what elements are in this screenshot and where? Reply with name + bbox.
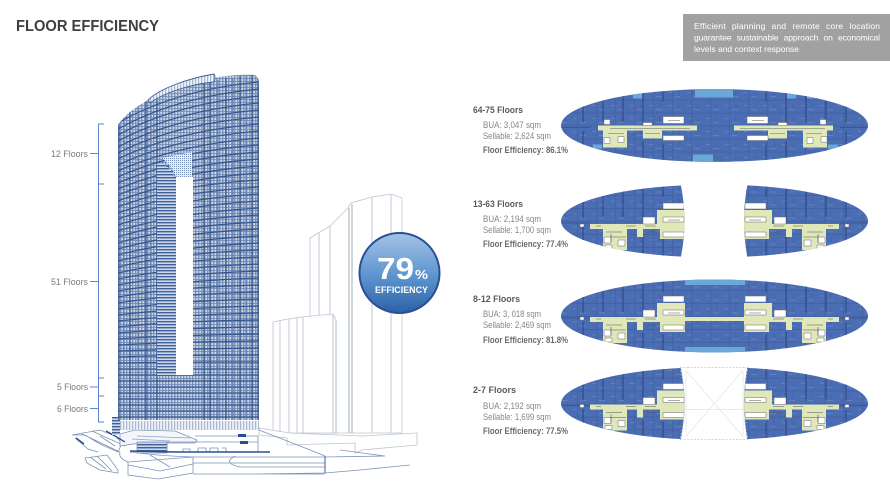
stats: 64-75 floors: Sellable: 2,624 sqm bbox=[483, 131, 551, 142]
podium and landscape line drawing bbox=[72, 417, 410, 479]
stats: 64-75 floors bbox=[473, 105, 568, 156]
floor labels: 6 Floors bbox=[57, 404, 88, 415]
callout: planning note: levels and context response bbox=[694, 44, 799, 54]
curved floor bands bbox=[118, 82, 259, 417]
floor plan: 8-12 floors bbox=[560, 278, 870, 354]
atrium void bbox=[680, 368, 748, 440]
floor plan: 13-63 floors bbox=[560, 183, 870, 259]
stats: 2-7 floors bbox=[473, 385, 568, 437]
floor plan: 64-75 floors bbox=[560, 88, 870, 164]
stats: 13-63 floors: Sellable: 1,700 sqm bbox=[483, 225, 551, 236]
panel: 13-63 floors bbox=[473, 183, 870, 259]
title: FLOOR EFFICIENCY bbox=[16, 18, 159, 35]
stats: 64-75 floors: 64-75 Floors bbox=[473, 105, 523, 116]
efficiency badge bbox=[360, 233, 440, 313]
facade mullions bbox=[119, 75, 258, 420]
tower base strip bbox=[120, 421, 259, 430]
floor labels: 5 Floors bbox=[57, 382, 88, 393]
neighbouring buildings outline bbox=[259, 194, 417, 453]
tower facade bbox=[118, 70, 259, 420]
stats: 8-12 floors: Floor Efficiency: 81.8% bbox=[483, 335, 568, 346]
lower plaza bbox=[85, 452, 193, 479]
stats: 2-7 floors: Sellable: 1,699 sqm bbox=[483, 412, 551, 423]
stats: 2-7 floors: Floor Efficiency: 77.5% bbox=[483, 426, 568, 437]
stats: 8-12 floors bbox=[473, 294, 568, 346]
stats: 64-75 floors: Floor Efficiency: 86.1% bbox=[483, 145, 568, 156]
main tower with sky opening bbox=[118, 70, 259, 420]
panel: 64-75 floors bbox=[473, 88, 870, 164]
right tower base block bbox=[259, 428, 417, 453]
floor labels: 12 Floors bbox=[51, 149, 88, 160]
inner wing face bbox=[157, 162, 176, 376]
left access drive bbox=[72, 430, 125, 452]
dome bbox=[157, 424, 177, 430]
road sweep bbox=[130, 450, 410, 474]
floor labels: 51 Floors bbox=[51, 277, 88, 288]
panel: 8-12 floors bbox=[473, 278, 870, 354]
efficiency badge: 79 bbox=[377, 251, 414, 286]
front building bbox=[167, 436, 258, 452]
podium roof bbox=[120, 430, 197, 446]
floor labels bbox=[51, 149, 88, 415]
floor bracket annotation bbox=[90, 124, 104, 422]
crown at top of tower bbox=[148, 74, 215, 103]
callout: planning note: Efficient planning and remote core location bbox=[694, 21, 880, 31]
stats: 8-12 floors: Sellable: 2,469 sqm bbox=[483, 320, 551, 331]
efficiency badge: % bbox=[415, 267, 428, 282]
stats: 13-63 floors: Floor Efficiency: 77.4% bbox=[483, 239, 568, 250]
podium dark base line bbox=[130, 451, 270, 452]
efficiency badge: EFFICIENCY bbox=[375, 285, 429, 296]
stats: 13-63 floors: BUA: 2,194 sqm bbox=[483, 214, 541, 225]
lintel underside bbox=[162, 152, 192, 177]
panel: 2-7 floors bbox=[473, 366, 870, 442]
round block bbox=[137, 442, 167, 453]
stats: 8-12 floors: BUA: 3, 018 sqm bbox=[483, 309, 541, 320]
stats: 64-75 floors: BUA: 3,047 sqm bbox=[483, 120, 541, 131]
stats: 2-7 floors: BUA: 2,192 sqm bbox=[483, 401, 541, 412]
corner cylinder bbox=[112, 417, 120, 435]
floor plan: 2-7 floors bbox=[560, 366, 870, 442]
callout: planning note bbox=[683, 14, 890, 61]
stats: 13-63 floors: 13-63 Floors bbox=[473, 199, 523, 210]
stats: 8-12 floors: 8-12 Floors bbox=[473, 294, 520, 305]
callout: planning note: guarantee sustainable approach on economical bbox=[694, 32, 880, 42]
sky opening bbox=[176, 177, 193, 375]
stats: 2-7 floors: 2-7 Floors bbox=[473, 385, 516, 396]
stats: 13-63 floors bbox=[473, 199, 568, 250]
